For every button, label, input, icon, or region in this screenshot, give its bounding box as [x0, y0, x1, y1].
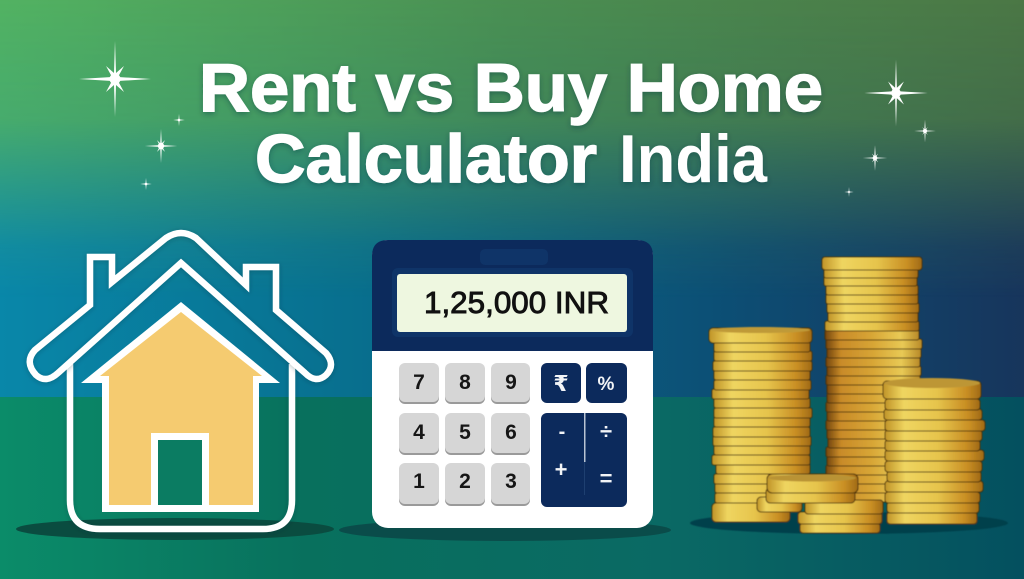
- sparkle: tiny upper left: [173, 114, 185, 126]
- sparkle: tiny lower left: [140, 178, 152, 190]
- number keys: 5: [459, 421, 471, 444]
- loose front coins: [757, 474, 883, 533]
- calculator notch: [480, 249, 548, 265]
- house icon: [16, 233, 334, 540]
- sparkle: large left: [79, 41, 151, 117]
- number keys: 8: [459, 371, 471, 394]
- calculator ground shadow: [339, 519, 671, 541]
- calculator: [339, 240, 671, 541]
- operator keys: ₹: [553, 371, 569, 396]
- operator keys: [541, 363, 627, 507]
- sparkle: medium right: [863, 145, 887, 171]
- house roof and chimneys: [30, 233, 331, 379]
- number keys: 6: [505, 421, 517, 444]
- coin stack: left: [709, 327, 812, 522]
- house ground shadow: [16, 518, 334, 540]
- operator keys: +: [555, 457, 567, 482]
- number keys: 1: [413, 470, 425, 493]
- number keys: 9: [505, 371, 517, 394]
- sparkle: small right upper: [914, 120, 936, 142]
- house front white border: [81, 302, 280, 512]
- sparkles: [79, 41, 936, 197]
- operator keys: =: [600, 466, 612, 491]
- title line 1: Rent vs Buy Home: [199, 50, 823, 126]
- calculator screen: [392, 268, 633, 337]
- gold coin stacks: [690, 257, 1008, 534]
- number keys: 2: [459, 470, 471, 493]
- number keys: 7: [413, 371, 425, 394]
- sparkle: medium left: [145, 129, 177, 163]
- house door: [151, 433, 209, 512]
- sparkle: large right: [864, 60, 928, 126]
- operator keys: -: [559, 421, 565, 443]
- house front yellow fill: [100, 312, 262, 505]
- calculator header: [372, 240, 653, 351]
- coin stacks ground shadow: [690, 512, 1008, 534]
- title: [199, 50, 823, 197]
- calculator body: [372, 240, 653, 528]
- number keys: [399, 363, 530, 506]
- house outline body: [70, 364, 292, 529]
- number keys: 3: [505, 470, 517, 493]
- number keys: 4: [413, 421, 425, 444]
- operator keys: %: [598, 374, 615, 395]
- sparkle: tiny right: [844, 187, 854, 197]
- operator keys: ÷: [600, 419, 612, 444]
- title line 2: Calculator: [255, 121, 597, 197]
- calculator screen: 1,25,000 INR: [424, 285, 609, 320]
- coin stack: right: [883, 378, 985, 524]
- title word: India: India: [619, 121, 768, 197]
- coin stack: middle tall: [825, 330, 922, 502]
